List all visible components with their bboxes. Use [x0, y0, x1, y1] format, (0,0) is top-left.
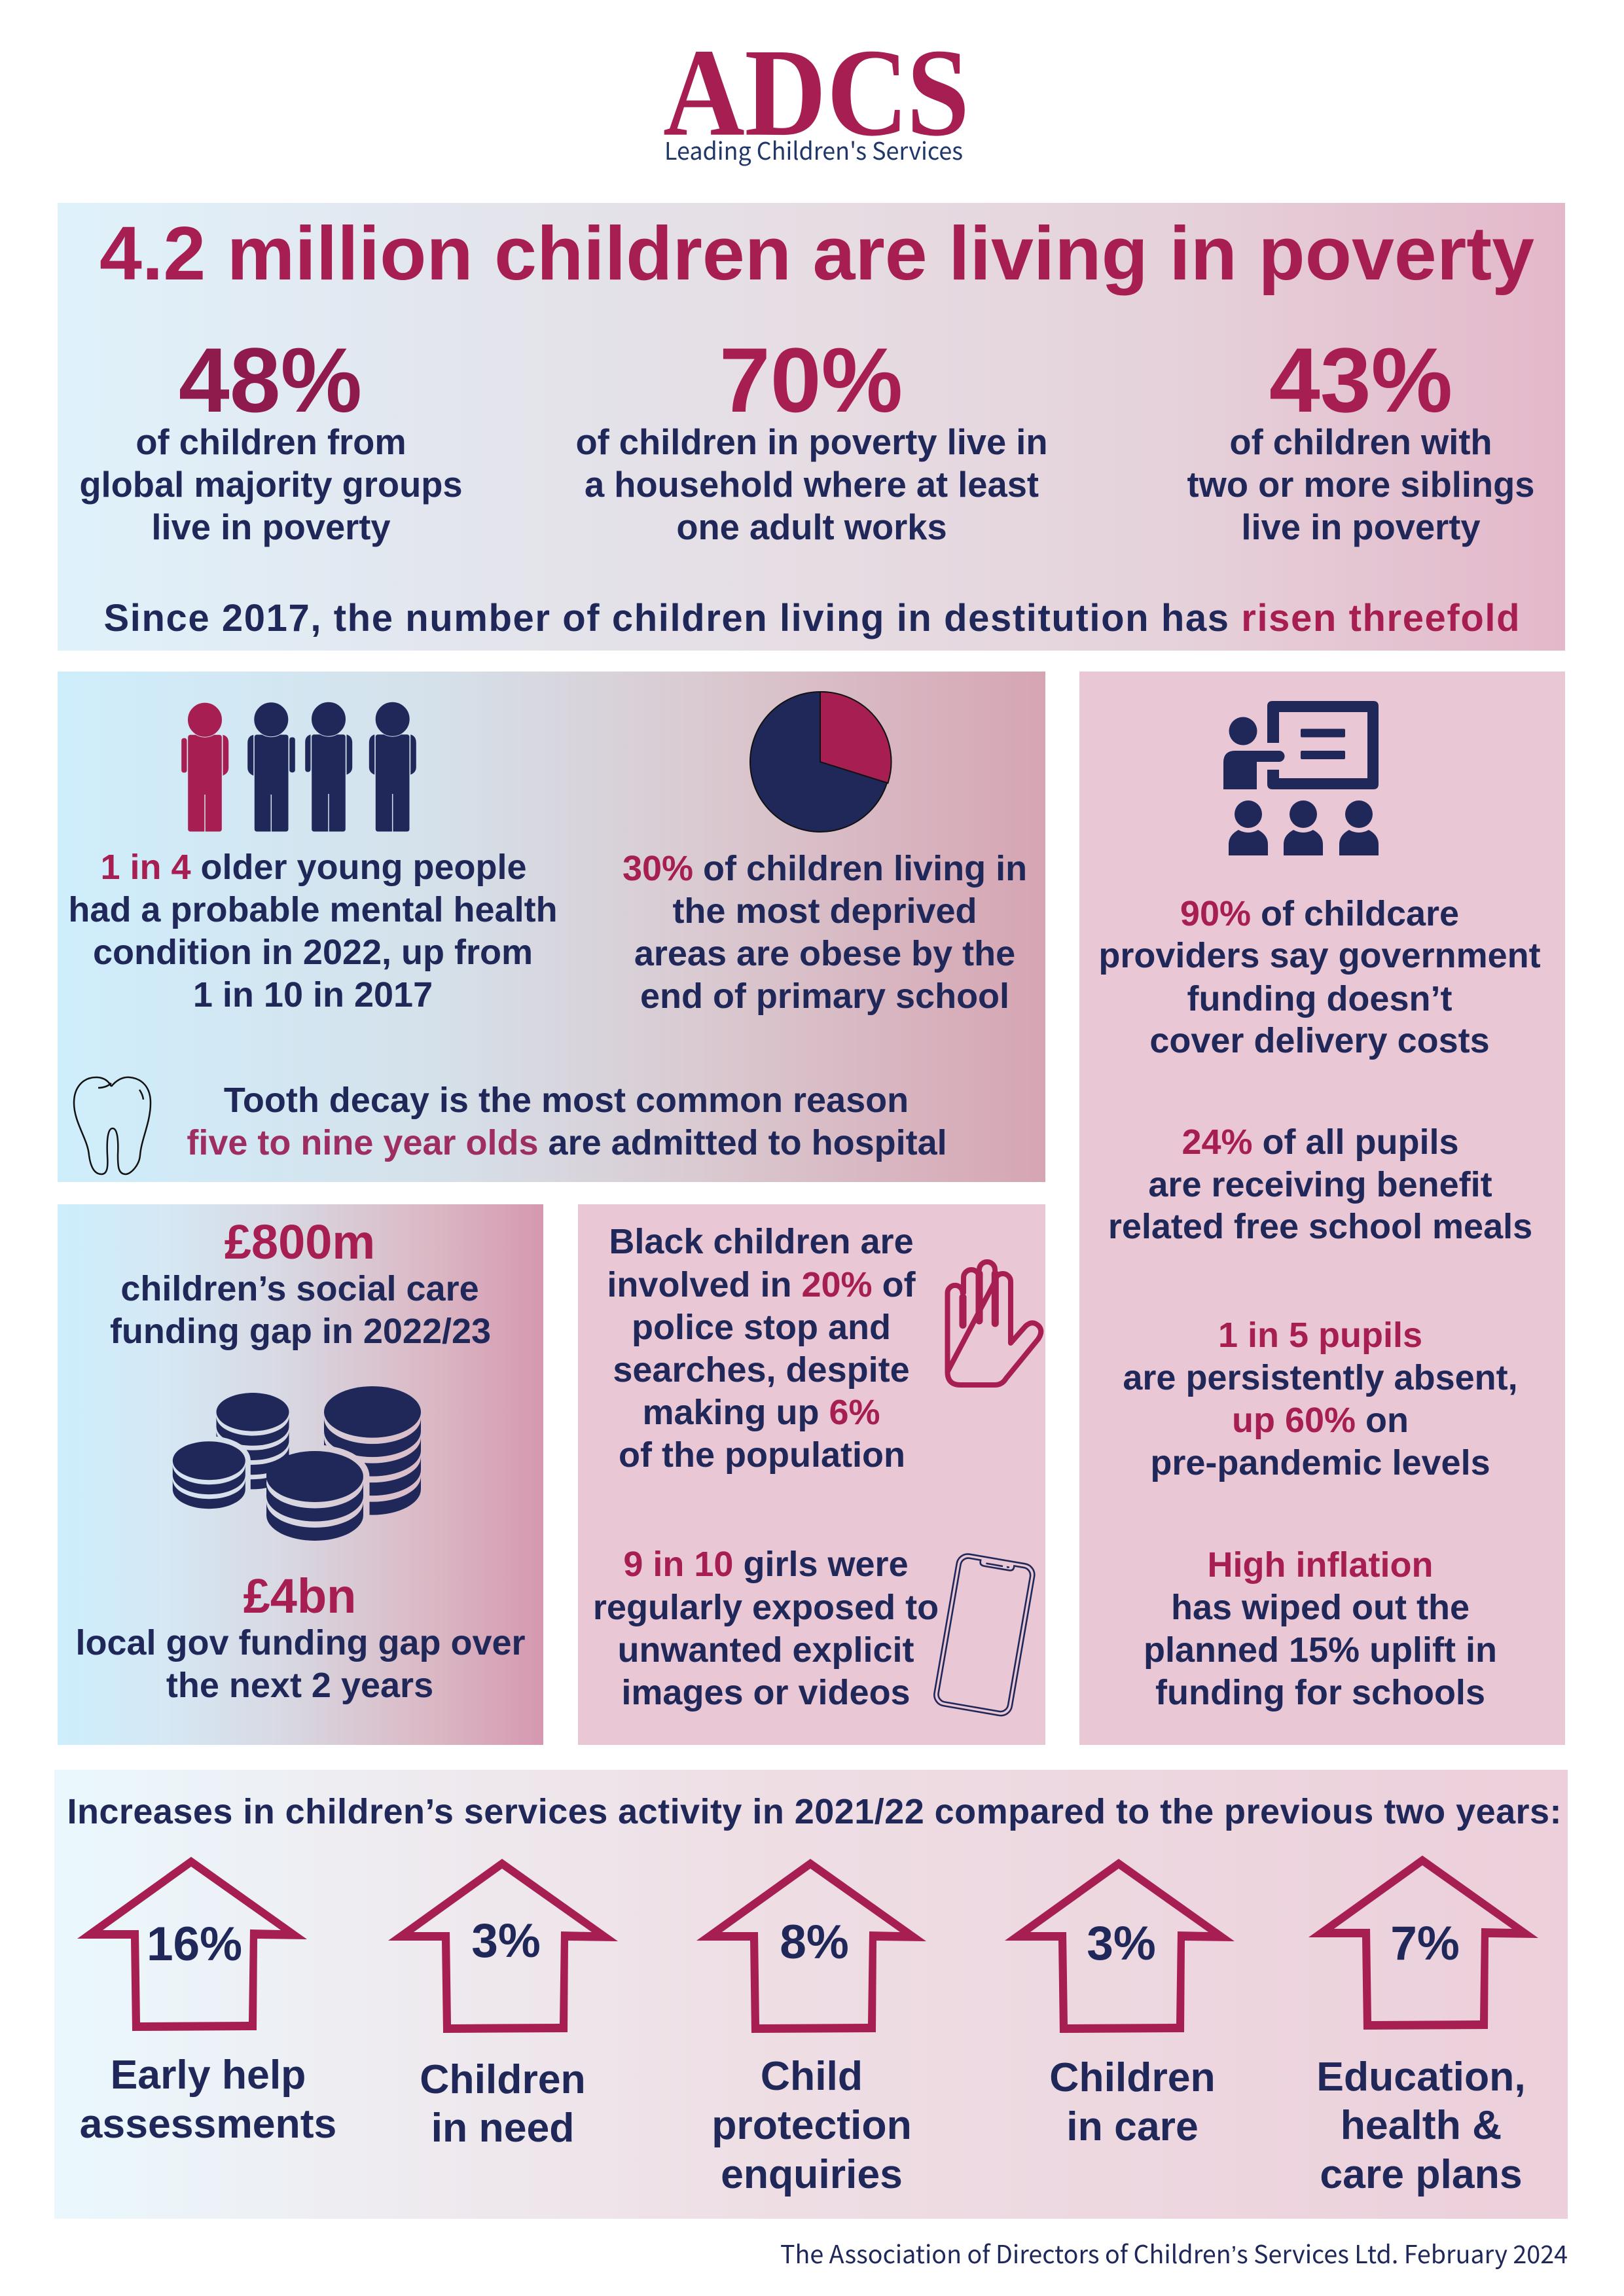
stat: £800m: £800m [225, 1215, 375, 1269]
text: stop and search: searches, despite [613, 1350, 910, 1390]
stat: 43% two or more siblings [1187, 329, 1534, 547]
panel: education [1079, 672, 1565, 1745]
arrow: 3% children in need [388, 1859, 618, 2151]
arrow: 16% early help: assessments [80, 2101, 336, 2147]
text: mental health: 1 in 4 older young people [100, 848, 527, 887]
heading: activity increases: Increases in children’s services activity in 2021/22 compared to the previous two years: [67, 1792, 1562, 1831]
icon: smartphone [933, 1552, 1036, 1717]
text: inflation: High inflation [1208, 1545, 1433, 1585]
text: free school meals: are receiving benefit [1148, 1165, 1492, 1204]
panel: services activity [54, 1770, 1568, 2219]
arrow: 8% child protection: enquiries [721, 2151, 903, 2197]
arrow: 16% early help: Early help [111, 2052, 306, 2098]
panel: funding gaps [58, 1204, 543, 1745]
text: mental health [68, 848, 558, 1014]
icon: four people [181, 702, 416, 832]
stat: 48% global majority groups: global majority groups [79, 465, 463, 505]
stat: 70% working households: of children in poverty live in [575, 422, 1048, 462]
stat: £800m: children’s social care [120, 1269, 479, 1308]
title: 4.2 million children are living in poverty [99, 211, 1534, 296]
stat: 70% working households: 70% [719, 329, 903, 431]
stat: 48% global majority groups: live in poverty [151, 507, 391, 547]
arrow: 8% child protection: protection [712, 2102, 912, 2148]
text: explicit images [593, 1545, 939, 1712]
text: free school meals: related free school meals [1108, 1207, 1532, 1246]
logo: ADCS: Leading Children's Services [664, 132, 963, 167]
text: stop and search: of the population [619, 1435, 905, 1475]
text: childcare funding: funding doesn’t [1187, 979, 1452, 1018]
icon: pie chart 30% [750, 692, 892, 832]
logo: ADCS: ADCS [663, 22, 969, 162]
stat: 70% working households [575, 329, 1048, 547]
arrow: 3% children in need: 3% [471, 1914, 541, 1967]
stat: £800m [110, 1215, 491, 1351]
stat: £800m: funding gap in 2022/23 [110, 1312, 491, 1351]
arrow: 3% children in care: Children [1049, 2054, 1216, 2100]
text: tooth decay: Tooth decay is the most common reason [224, 1081, 909, 1120]
panel: health [58, 672, 1045, 1182]
arrow: 3% children in need: in need [431, 2105, 574, 2151]
text: stop and search: involved in 20% of [607, 1265, 916, 1304]
text: inflation: funding for schools [1155, 1673, 1485, 1712]
text: explicit images: 9 in 10 girls were [623, 1545, 909, 1584]
text: explicit images: unwanted explicit [617, 1630, 914, 1670]
text: mental health: 1 in 10 in 2017 [193, 975, 433, 1014]
panel: safety [578, 1204, 1045, 1745]
text: childcare funding [1098, 894, 1541, 1060]
text: obesity: areas are obese by the [634, 934, 1015, 973]
text: mental health: condition in 2022, up from [93, 933, 533, 972]
arrow: 3% children in need: Children [420, 2056, 586, 2102]
text: obesity: end of primary school [640, 977, 1009, 1016]
text: absence: are persistently absent, [1123, 1358, 1518, 1397]
icon: raised hand [948, 1262, 1041, 1385]
stat: 48% global majority groups: of children from [135, 422, 406, 462]
text: stop and search: Black children are [609, 1222, 914, 1261]
text: explicit images: regularly exposed to [593, 1588, 939, 1627]
icon: tooth [74, 1077, 151, 1174]
text: obesity: 30% of children living in [623, 849, 1027, 888]
destitution statement: Since 2017, the number of children living in destitution has risen threefold [103, 597, 1520, 639]
arrow: 7% education health care plans: Education, [1316, 2054, 1526, 2100]
arrow: 3% children in care [1005, 1859, 1235, 2149]
text: explicit images: images or videos [621, 1673, 911, 1712]
stat: 43% two or more siblings: two or more siblings [1187, 465, 1534, 505]
text: absence: up 60% on [1232, 1401, 1409, 1440]
text: free school meals: 24% of all pupils [1182, 1122, 1459, 1162]
arrow: 8% child protection: 8% [780, 1916, 849, 1969]
text: mental health: had a probable mental health [68, 890, 558, 929]
arrow: 16% early help [77, 1857, 336, 2147]
icon: teacher and pupils [1223, 701, 1379, 855]
text: stop and search [607, 1222, 916, 1475]
stat: £4bn: £4bn [244, 1569, 356, 1623]
arrow: 16% early help: 16% [147, 1918, 242, 1971]
panel: poverty headline [58, 203, 1565, 651]
stat: 48% global majority groups: 48% [179, 329, 362, 431]
text: tooth decay: five to nine year olds are admitted to hospital [187, 1123, 947, 1162]
text: obesity [623, 849, 1027, 1016]
stat: 43% two or more siblings: of children with [1229, 422, 1492, 462]
stat: 48% global majority groups [79, 329, 463, 547]
text: tooth decay [187, 1081, 947, 1162]
text: absence: 1 in 5 pupils [1218, 1316, 1422, 1355]
stat: 70% working households: a household where at least [585, 465, 1039, 505]
text: inflation: planned 15% uplift in [1144, 1630, 1497, 1670]
arrow: 8% child protection [696, 1859, 926, 2197]
stat: £4bn [75, 1569, 526, 1705]
arrow: 7% education health care plans [1308, 1856, 1538, 2197]
text: inflation: has wiped out the [1171, 1588, 1470, 1627]
text: free school meals [1108, 1122, 1532, 1246]
text: inflation [1144, 1545, 1497, 1712]
text: obesity: the most deprived [672, 891, 977, 931]
arrow: 7% education health care plans: care plans [1320, 2151, 1523, 2197]
stat: 43% two or more siblings: 43% [1269, 329, 1453, 431]
text: childcare funding: providers say government [1098, 936, 1541, 975]
text: childcare funding: 90% of childcare [1180, 894, 1459, 933]
text: absence [1123, 1316, 1518, 1482]
text: stop and search: making up 6% [642, 1393, 880, 1432]
arrow: 8% child protection: Child [761, 2053, 863, 2099]
arrow: 7% education health care plans: health & [1341, 2102, 1502, 2148]
arrow: 7% education health care plans: 7% [1390, 1917, 1460, 1970]
stat: 70% working households: one adult works [676, 507, 947, 547]
arrow: 3% children in care: in care [1066, 2104, 1199, 2149]
footer credit: The Association of Directors of Children’s Services Ltd. February 2024 [780, 2234, 1568, 2270]
icon: coin stacks [173, 1386, 421, 1541]
arrow: 3% children in care: 3% [1087, 1917, 1156, 1970]
text: childcare funding: cover delivery costs [1149, 1021, 1490, 1060]
text: absence: pre-pandemic levels [1150, 1443, 1490, 1482]
stat: £4bn: local gov funding gap over [75, 1623, 526, 1662]
text: stop and search: police stop and [632, 1308, 891, 1347]
stat: 43% two or more siblings: live in poverty [1241, 507, 1481, 547]
stat: £4bn: the next 2 years [166, 1666, 433, 1705]
